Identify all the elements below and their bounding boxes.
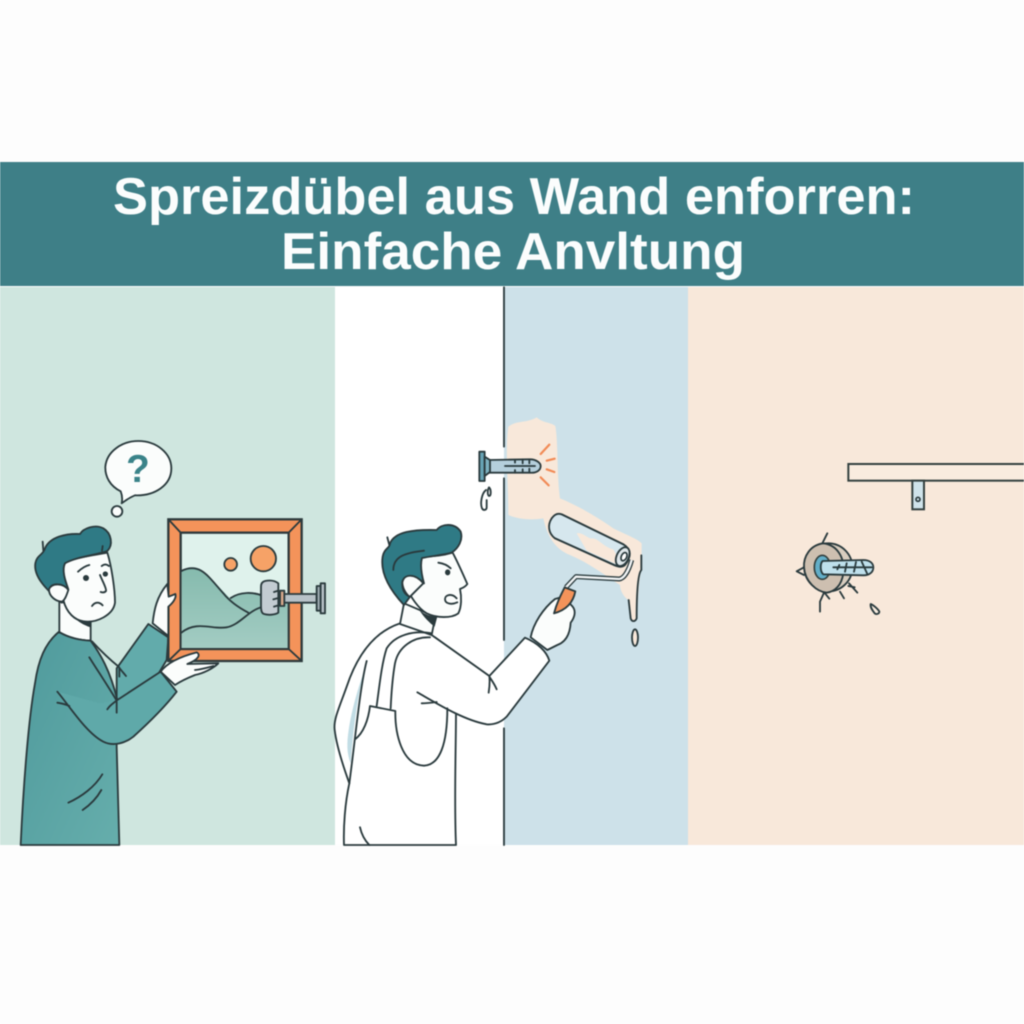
panel: peach background (688, 287, 1024, 845)
water drips below dowel (481, 487, 491, 510)
person: overall back strap shadow (348, 667, 363, 783)
person: hair (35, 527, 111, 603)
person: neck (59, 600, 91, 641)
dowel in hole (821, 560, 873, 575)
thought bubble with question mark: ? (126, 448, 150, 491)
person: back arm sleeve (117, 624, 168, 707)
roller orange handle (554, 587, 575, 613)
paint roller (549, 514, 632, 587)
person: sweater fold lines (68, 641, 126, 810)
person: front sleeve arm (57, 672, 177, 744)
shelf with bracket (848, 464, 1024, 509)
paint drip outline (629, 555, 641, 621)
person: face (407, 553, 467, 617)
person: strap, bib and arm lines (349, 632, 549, 845)
picture frame (168, 519, 302, 661)
hand behind frame with fingers over it (153, 584, 176, 636)
paint drop (632, 629, 638, 646)
person: teal sweater body (21, 632, 119, 845)
person: ear (402, 576, 423, 597)
panel 1 scene: confused man holding picture (21, 441, 325, 845)
roller cover (549, 514, 630, 567)
sleeve outline (57, 672, 177, 744)
orange impact marks (541, 445, 555, 485)
wall divider line (501, 287, 507, 845)
panel: teal background (0, 287, 335, 845)
fallen plaster chip (871, 604, 879, 614)
sun and moon circles (251, 546, 276, 571)
person: hair strand (387, 537, 424, 570)
person: worried face details (43, 542, 109, 606)
thought bubble with question mark (105, 441, 171, 517)
person: ear (49, 584, 68, 602)
title banner (0, 162, 1024, 286)
title banner: Einfache Anvltung (281, 223, 745, 281)
person: white overall body (334, 623, 490, 845)
dowel coming out of the wall (479, 452, 541, 481)
title banner: Spreizdübel aus Wand enforren: (113, 168, 915, 226)
person: shadow under chin (74, 617, 91, 627)
roller arm rod (566, 560, 632, 587)
wall anchor through picture (261, 581, 325, 615)
panel 4 scene: shelf and dowel in wall (797, 464, 1024, 614)
fingers line (195, 666, 213, 670)
paint patch (507, 417, 642, 620)
panel: blue background (504, 287, 688, 845)
person: face (63, 553, 115, 622)
person: angry face details (438, 563, 457, 604)
picture hills (182, 568, 288, 648)
person: neck (400, 603, 435, 635)
person: hand on roller (531, 597, 575, 650)
person: shadow under chin (419, 610, 437, 627)
panel 2 scene: man painting the wall (334, 287, 642, 845)
broken wall hole (797, 533, 857, 612)
panel: white background (335, 287, 504, 845)
person: blue sliver (347, 670, 365, 763)
person: painting arm sleeve fill (405, 637, 549, 724)
front hand on frame (161, 652, 218, 685)
person: hair (382, 525, 461, 605)
